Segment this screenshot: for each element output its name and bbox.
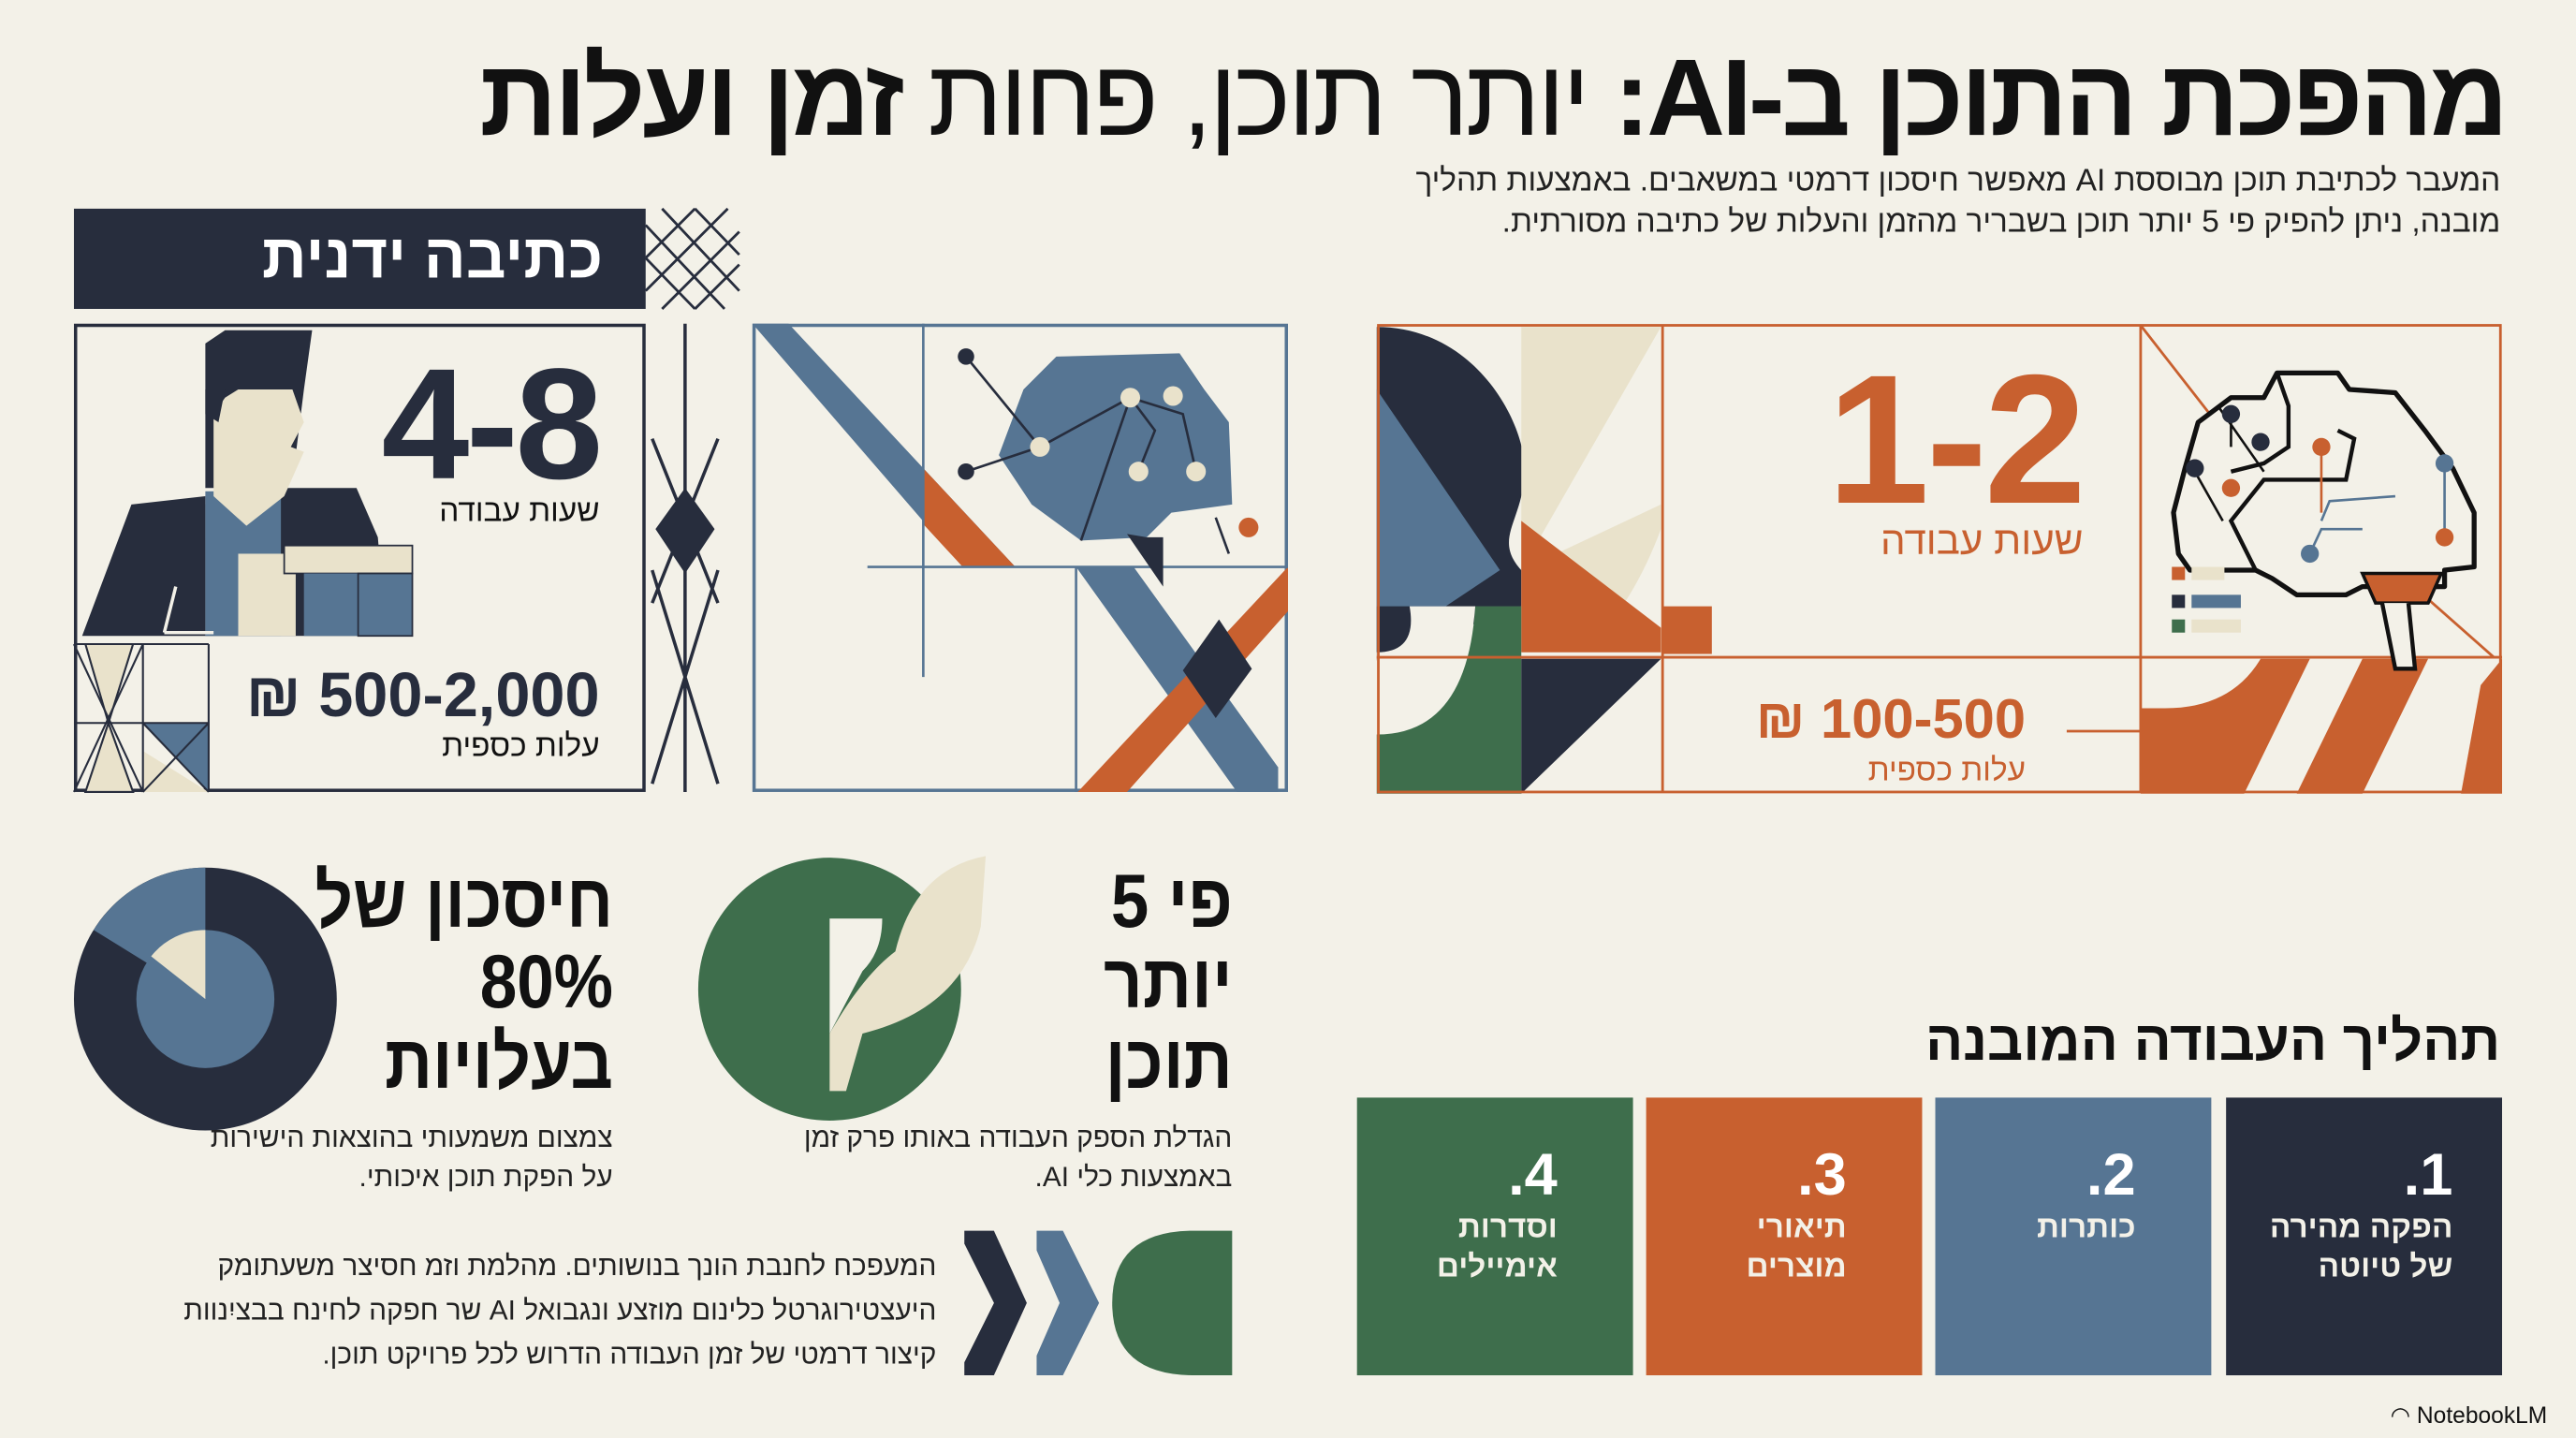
- stat: 80% savings: בעלויות: [385, 1019, 613, 1104]
- step 2: כותרות: [2037, 1211, 2136, 1245]
- panel: AI writing: עלות כספית: [1868, 755, 2026, 788]
- panel: AI writing: [1376, 324, 2503, 794]
- header text: כתיבה ידנית: [262, 224, 603, 292]
- step 3: תיאורי: [1757, 1211, 1847, 1245]
- decorative triangle grid: [74, 644, 209, 792]
- caption: savings: [211, 1123, 613, 1193]
- subtitle: מובנה, ניתן להפיק פי 5 יותר תוכן בשבריר מהזמן והעלות של כתיבה מסורתית.: [1502, 205, 2500, 240]
- step 4: אימיילים: [1437, 1251, 1558, 1284]
- step 4: וסדרות: [1458, 1211, 1558, 1245]
- divider ornament: [651, 324, 720, 792]
- chart: savings donut: [73, 867, 337, 1131]
- stat: hours manual: 4-8: [382, 337, 600, 513]
- logo: NotebookLM: ◠ NotebookLM: [2391, 1401, 2547, 1428]
- stat: cost AI: 100-500 ₪: [1756, 688, 2026, 751]
- caption: savings: צמצום משמעותי בהוצאות הישירות: [211, 1123, 613, 1153]
- stat: hours AI: 1-2: [1827, 337, 2083, 542]
- step 4: [1357, 1097, 1633, 1375]
- paragraph: היעצטירוגרטל כלינום מוזצע ונגבואל AI שר חפקה לחינח בבציִנוות: [183, 1295, 936, 1326]
- step 4: 4.: [1508, 1140, 1558, 1208]
- stat: 80% savings: 80%: [479, 938, 613, 1023]
- caption: content: [804, 1123, 1232, 1193]
- panel: manual writing: שעות עבודה: [439, 494, 600, 529]
- panel: manual writing: עלות כספית: [442, 729, 600, 764]
- manual writing header: [73, 208, 740, 310]
- stat: cost manual: 500-2,000 ₪: [246, 662, 600, 731]
- title: מהפכת התוכן ב-AI: יותר תוכן, פחות זמן ועלות: [479, 37, 2506, 157]
- paragraph: [183, 1251, 936, 1371]
- step 2: 2.: [2086, 1140, 2136, 1208]
- step 1: של טיוטה: [2319, 1251, 2452, 1284]
- step 3: [1647, 1097, 1922, 1375]
- step 1: 1.: [2404, 1140, 2452, 1208]
- decorative geometric art: [1377, 327, 1712, 794]
- icon: person: [82, 330, 413, 636]
- panel: manual writing: [73, 324, 646, 793]
- icon: chevrons: [964, 1230, 1232, 1375]
- subtitle: המעבר לכתיבת תוכן מבוססת AI מאפשר חיסכון דרמטי במשאבים. באמצעות תהליך: [1415, 165, 2500, 198]
- caption: content: הגדלת הספק העבודה באותו פרק זמן: [804, 1123, 1232, 1153]
- stat: 5x content: פי 5: [1110, 858, 1232, 943]
- stat: 80% savings: [315, 858, 613, 1104]
- caption: savings: על הפקת תוכן איכותי.: [359, 1162, 613, 1193]
- paragraph: המעפכח לחנבת הונך בנושותים. מהלמת וזמ חסיצר משעתומק: [218, 1251, 936, 1282]
- decorative stripes: [2141, 659, 2502, 794]
- subtitle: [1415, 165, 2500, 240]
- stat: 5x content: יותר: [1103, 938, 1232, 1023]
- step 1: [2226, 1097, 2502, 1375]
- stat: 80% savings: חיסכון של: [315, 858, 613, 943]
- process steps: [1357, 1097, 2502, 1376]
- panel: AI writing: שעות עבודה: [1881, 520, 2083, 564]
- icon: circuit brain: [2172, 373, 2474, 668]
- icon: AI brain: [958, 348, 1258, 587]
- step 3: 3.: [1797, 1140, 1847, 1208]
- paragraph: קיצור דרמטי של זמן העבודה הדרוש לכל פרויקט תוכן.: [322, 1339, 936, 1371]
- step 1: הפקה מהירה: [2270, 1211, 2452, 1245]
- heading: process: תהליך העבודה המובנה: [1925, 1010, 2500, 1073]
- stat: 5x content: [1103, 858, 1232, 1104]
- icon: growth shape: [698, 856, 986, 1121]
- step 2: [1936, 1097, 2211, 1375]
- step 3: מוצרים: [1747, 1251, 1847, 1284]
- stat: 5x content: תוכן: [1105, 1019, 1232, 1104]
- panel: abstract AI illustration: [753, 324, 1288, 792]
- caption: content: באמצעות כלי AI.: [1035, 1162, 1232, 1193]
